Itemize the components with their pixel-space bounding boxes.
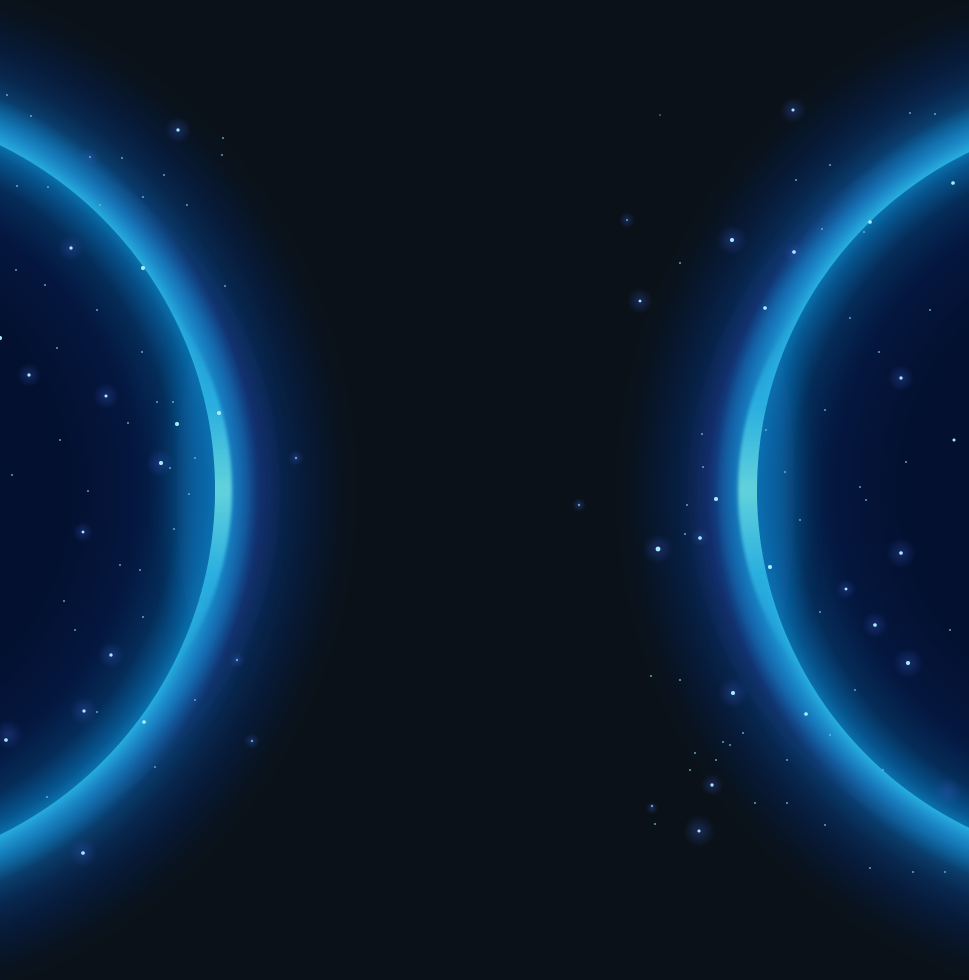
right purple shoulder xyxy=(698,130,969,850)
left inner disc xyxy=(0,106,215,874)
small stars xyxy=(6,94,951,873)
right outer glow xyxy=(612,0,969,980)
left rim glow xyxy=(0,64,257,916)
right inner rim glow xyxy=(757,370,809,610)
left bright crescent xyxy=(0,183,232,797)
star halos xyxy=(0,97,962,867)
left blue shoulder xyxy=(0,140,250,840)
right inner disc xyxy=(757,115,969,865)
right blue shoulder xyxy=(718,140,969,840)
large stars xyxy=(0,108,956,855)
right bright crescent xyxy=(738,190,969,790)
right circle xyxy=(634,20,969,960)
left inner rim glow xyxy=(163,370,215,610)
left circle xyxy=(0,0,361,980)
left purple shoulder xyxy=(0,130,270,850)
left outer glow xyxy=(0,0,361,980)
right rim glow xyxy=(715,73,969,907)
